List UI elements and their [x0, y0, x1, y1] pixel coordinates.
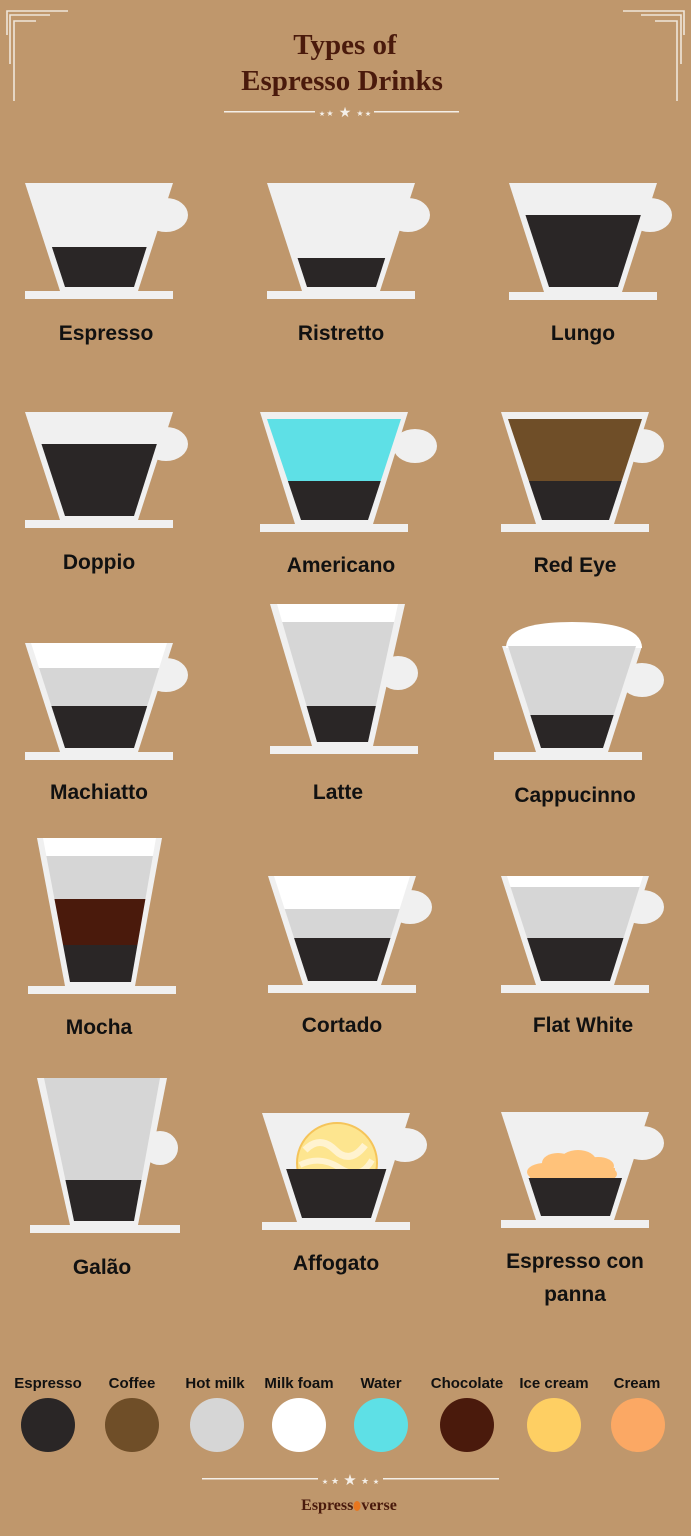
- footer divider: ★: [343, 1472, 357, 1489]
- cup: Doppio: Doppio: [63, 551, 135, 574]
- cup: Red Eye: [501, 412, 664, 576]
- cup: Machiatto: [25, 643, 188, 799]
- cup: Espresso con panna: [501, 1112, 664, 1306]
- title divider: ★: [365, 110, 371, 118]
- cup: Espresso: [25, 183, 188, 344]
- cup: Galão: Galão: [73, 1256, 131, 1279]
- cup: Espresso con panna: Espresso con: [506, 1250, 644, 1273]
- legend: [14, 1375, 665, 1452]
- footer divider: ★: [322, 1478, 328, 1486]
- corner frame: top right: [623, 11, 684, 101]
- cup: Doppio: [25, 412, 188, 574]
- legend: Chocolate: [431, 1375, 503, 1392]
- title divider: ★: [319, 110, 325, 118]
- title divider: ★: [339, 104, 351, 120]
- cup: Cappucinno: [494, 622, 664, 806]
- legend: Water: [360, 1375, 402, 1392]
- cup: Ristretto: Ristretto: [298, 322, 384, 345]
- cup: Ristretto: [267, 183, 430, 340]
- title: Types of: [293, 29, 397, 61]
- title divider: [224, 104, 459, 120]
- cup: Latte: Latte: [313, 781, 363, 804]
- cup: Galão: [30, 1078, 180, 1274]
- legend: Milk foam: [264, 1375, 334, 1392]
- legend: Coffee: [109, 1375, 155, 1392]
- cup: Red Eye: Red Eye: [534, 554, 616, 577]
- cup: Flat White: [501, 876, 664, 1032]
- legend: Cream: [614, 1375, 660, 1392]
- cup: Affogato: [262, 1113, 427, 1274]
- legend: Espresso: [14, 1375, 82, 1392]
- cup: Mocha: Mocha: [66, 1016, 133, 1039]
- footer divider: ★: [373, 1478, 379, 1486]
- cup: Lungo: Lungo: [551, 322, 615, 345]
- cup: Americano: Americano: [287, 554, 395, 577]
- footer divider: ★: [361, 1476, 369, 1486]
- cup: Lungo: [509, 183, 672, 344]
- cup: Flat White: Flat White: [533, 1014, 633, 1037]
- corner frame: top left: [7, 11, 68, 101]
- cup: Affogato: Affogato: [293, 1252, 379, 1275]
- legend: Ice cream: [519, 1375, 589, 1392]
- legend: Hot milk: [185, 1375, 245, 1392]
- footer divider: ★: [331, 1476, 339, 1486]
- cup: Latte: [270, 604, 418, 799]
- title: Espresso Drinks: [241, 65, 443, 97]
- title divider: ★: [356, 109, 364, 118]
- title: [241, 29, 443, 97]
- cup: Mocha: [28, 838, 176, 1034]
- cup: Machiatto: Machiatto: [50, 781, 148, 804]
- cup: Espresso: Espresso: [59, 322, 153, 345]
- cup: Espresso con panna: panna: [544, 1283, 606, 1306]
- title divider: ★: [326, 109, 334, 118]
- footer brand: Espressoverse: [301, 1497, 397, 1514]
- cup: Americano: [260, 412, 437, 572]
- cup: Cappucinno: Cappucinno: [514, 784, 636, 807]
- footer divider: [202, 1472, 499, 1489]
- cup: Cortado: [268, 876, 432, 1032]
- cup: Cortado: Cortado: [302, 1014, 382, 1037]
